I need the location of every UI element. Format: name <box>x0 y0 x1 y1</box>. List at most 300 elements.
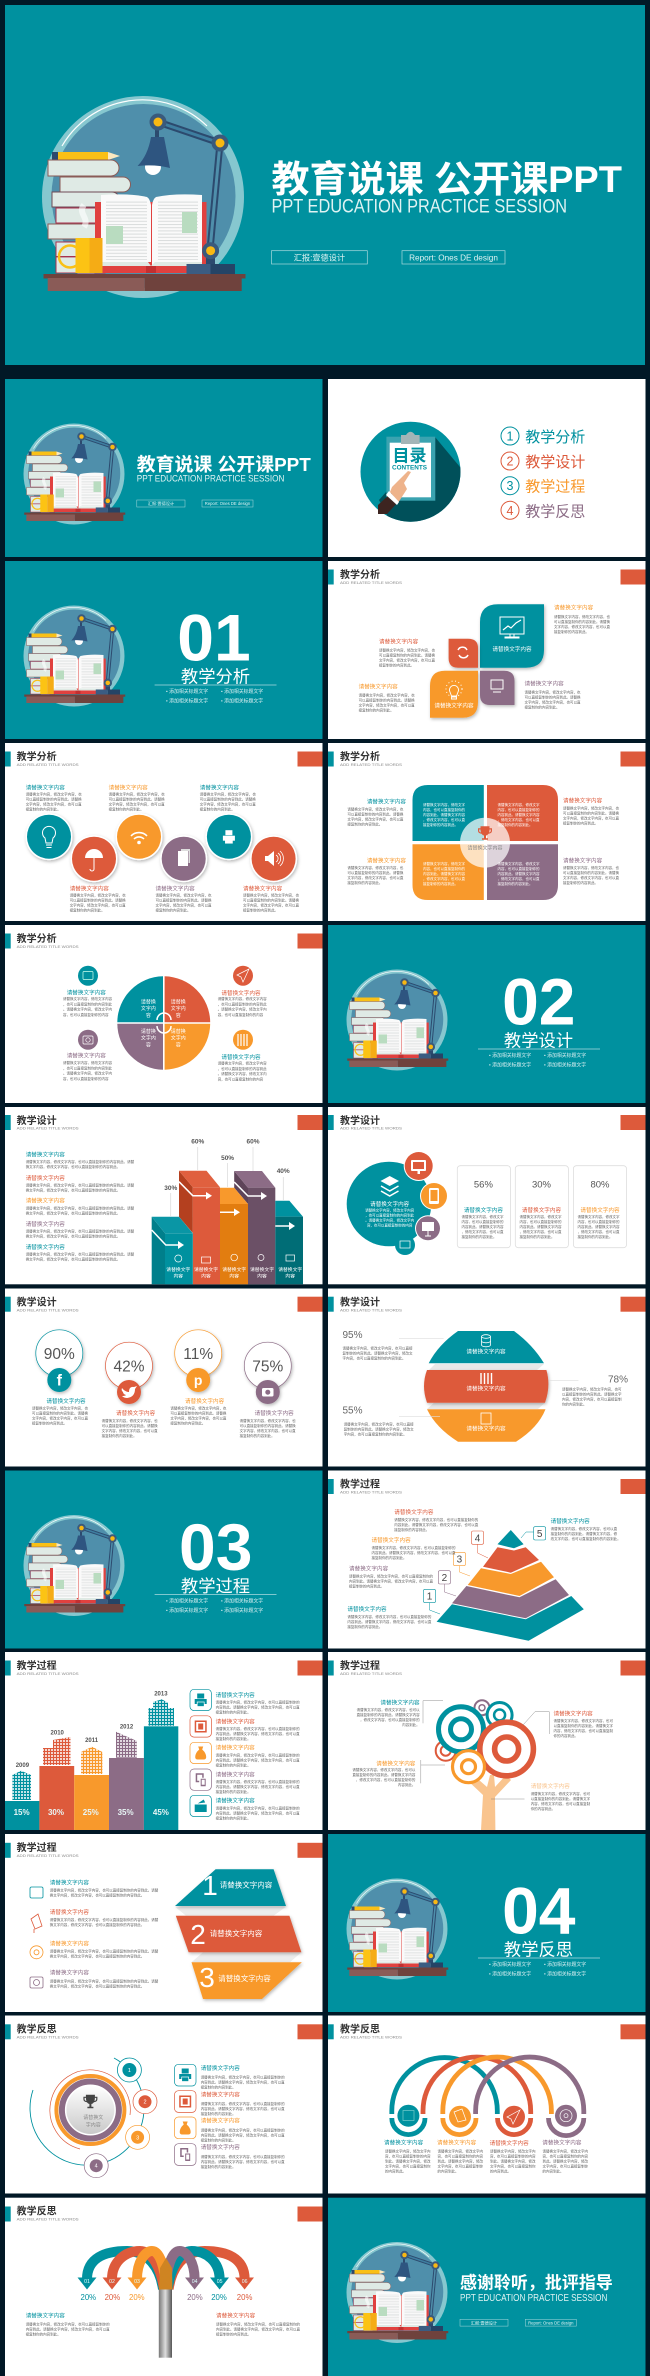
chart: bars with buildings: 2010 <box>51 1731 65 1737</box>
text block: 文字内容，修改文字内容，也可以直 <box>156 902 212 908</box>
text block: 接复制你的内容到此。 <box>243 908 278 912</box>
callout 5: 5 <box>537 1529 543 1540</box>
contents item 4 <box>501 501 585 520</box>
text block: 容，也可以直接复制你的内容 <box>542 2154 588 2158</box>
chart: 3D bars: 30% <box>164 1185 178 1192</box>
bullet texts: • 添加相关标题文字 <box>166 698 208 704</box>
text block: 到此。请替换文字内容，修改 <box>385 2158 431 2164</box>
callout 4 <box>472 1531 488 1558</box>
chart: bars with buildings <box>5 1691 178 1830</box>
panel: process building bars <box>5 1652 322 1830</box>
pie chart: 容 <box>146 1012 151 1019</box>
slide heading: 教学反思 <box>17 2022 57 2036</box>
badge: presenter: 汇报:壹德设计 <box>148 500 174 507</box>
panel: contents <box>328 379 646 557</box>
stat 55% <box>342 1406 440 1436</box>
text block: 请替换文字内容，修改文字内容，也 <box>32 1406 88 1410</box>
slide heading <box>5 2022 322 2039</box>
text block: 请替换文字内容 <box>67 989 106 997</box>
list item 1 <box>174 2064 285 2090</box>
stat 78%: 78% <box>608 1374 628 1385</box>
subtitle: PPT EDUCATION PRACTICE SESSION <box>272 196 567 218</box>
text block: 请替换文字内容，修改文字内容，也 <box>26 792 82 796</box>
list item 1: 内容到此。请替换文字内容，修改文字内容，也可以直 <box>201 2080 285 2084</box>
bullet texts: • 添加相关标题文字 <box>221 1607 263 1614</box>
text block: 请替换文字内容，修改文字内容，也 <box>563 806 619 810</box>
text block <box>563 797 619 826</box>
contents item 1 <box>501 427 585 446</box>
card: 30%: 内容，也可以直接复制你的 <box>520 1219 562 1224</box>
petal: teal: 请替换文字内容 <box>492 645 532 653</box>
text block: 请替换文字内容 <box>372 1536 411 1544</box>
text block <box>63 989 112 1017</box>
illustration <box>346 2242 448 2343</box>
ring: 90%: 90% <box>44 1346 75 1363</box>
text block: 文字内容，修改文字内容，也可以直 <box>26 802 82 806</box>
text block <box>347 1605 432 1629</box>
text block <box>554 603 610 634</box>
text block: 直接复制你的内容到此。请替换文字内容 <box>357 1712 420 1717</box>
slide heading: 教学分析 <box>340 568 380 581</box>
list item 1: 请替换文字内容 <box>50 1878 89 1886</box>
text block <box>384 2139 431 2174</box>
list item 4: 请替换文字内容，修改文字内容，也可以直接复制你的 <box>216 1779 300 1784</box>
orbit diagram: 1 <box>128 2068 131 2074</box>
percentage labels: 20% <box>129 2293 145 2302</box>
stat 95% <box>342 1330 444 1360</box>
text block: 文字内容，也可以直接复制你 <box>385 2164 431 2168</box>
text block <box>170 1397 227 1426</box>
text block: 请替换文字内容 <box>46 1397 86 1405</box>
text block: 接复制你的内容到此。 <box>347 822 382 826</box>
callout 2: 2 <box>442 1573 448 1584</box>
text block: 请替换文字内容 <box>200 783 239 791</box>
contents item 3: 3 <box>507 479 514 493</box>
text block <box>352 1759 416 1787</box>
text block: 请替换文字内容，修改文字内容，也 <box>347 806 404 812</box>
text block: 文字内容，修改文字内容，也可以直 <box>563 816 619 820</box>
list item 3 <box>30 1939 159 1959</box>
contents item 2: 2 <box>507 454 514 468</box>
chart: 3D bars: 60% <box>191 1138 205 1146</box>
stat 78%: 请替换文字内容，修改文字内容，也可 <box>562 1386 622 1392</box>
slide heading <box>328 750 646 767</box>
list item 4: 内容到此。请替换文字内容，修改文字内容，也可以直 <box>201 2159 285 2164</box>
text block: 容，也可以直接复制你的内容 <box>490 2154 536 2158</box>
list item 1 <box>190 1689 300 1714</box>
list item 2: 请替换文字内容，修改文字内容，也可以直接复制你的内容到此。请替 <box>50 1917 159 1922</box>
card: 56%: 内容到此。请替换文字内容 <box>462 1224 504 1229</box>
sliced circle: 请替换文字内容 <box>466 1385 506 1393</box>
text block: 文字内容，修改文字内容，也可以直 <box>170 1416 227 1420</box>
badge: presenter: 汇报:壹德设计 <box>294 252 345 262</box>
stat 95%: 复制你的内容到此。请替换文字内容，修改文 <box>342 1350 413 1356</box>
slide heading: 教学过程 <box>17 1841 57 1854</box>
circle: speaker <box>250 835 297 882</box>
text block: 到此。请替换文字内容，修改 <box>438 2158 483 2164</box>
slide heading: 教学反思 <box>340 2022 380 2036</box>
tile: teal: 内容到此。请替换文字内容 <box>423 812 465 817</box>
list text: 请替换文字内容，修改文字内容，也可以直接复制你的内容到此。请替 <box>26 1205 135 1210</box>
title: 教育说课 公开课PPT <box>272 159 622 200</box>
slide heading <box>5 750 322 767</box>
text block: 内容到此。请替换文字内容，修改文字内容，也可以直 <box>347 1619 432 1624</box>
text block: 可以直接复制你的内容到此。请替换 <box>563 810 619 816</box>
text block: 文字内容，也可以直接复制你 <box>438 2164 483 2168</box>
card: 56%: 内容，也可以直接复制你的 <box>462 1219 504 1224</box>
panel: analysis quadrant tiles <box>328 743 646 921</box>
bullet texts: • 添加相关标题文字 <box>544 1961 586 1968</box>
slide heading: ADD RELATED TITLE WORDS <box>340 1489 402 1494</box>
panel: cover thumbnail <box>5 379 322 557</box>
text block: ，也可以直接复制你的内容到此 <box>218 1001 267 1006</box>
stat 55%: 字内容，也可以直接复制你的内容到此。 <box>344 1432 407 1436</box>
text block: 接复制你的内容到此。 <box>379 662 414 668</box>
text block: ，修改文字内容，也可以直接复制你的 <box>360 1717 420 1722</box>
text block: 请替换文字内容 <box>367 798 406 806</box>
bullet texts: • 添加相关标题文字 <box>544 1970 586 1978</box>
bullet texts <box>166 688 263 704</box>
text block: 请替换文字内容 <box>367 856 406 864</box>
text block: 请替换文字内容 <box>554 603 594 611</box>
slide heading <box>328 2022 646 2039</box>
text block: 改文字内容，也可以直接复制你的内容到此。 <box>551 1536 621 1541</box>
ring: 11%: 11% <box>183 1346 213 1363</box>
ribbons <box>175 1869 302 1999</box>
pie chart: 请替换 <box>171 1028 186 1035</box>
chart: 3D bars: 40% <box>277 1168 290 1175</box>
illustration <box>346 1878 448 1980</box>
text block: 请替换文字内容 <box>551 1517 590 1525</box>
circle: umbrella <box>70 835 118 882</box>
text block: 请替换文字内容 <box>243 885 283 893</box>
list item 2 <box>31 1908 159 1933</box>
pie chart: 容 <box>176 1042 181 1048</box>
list item 2: 内容到此。请替换文字内容，修改文字内容，也可以直 <box>216 1731 300 1736</box>
contents item 3: 教学过程 <box>525 479 585 496</box>
text block <box>347 856 406 885</box>
text block <box>26 783 82 812</box>
illustration: books, desk lamp and mug <box>42 96 246 298</box>
text block: 容，也可以直接复制你的内容 <box>438 2154 483 2158</box>
text block <box>379 637 435 668</box>
bullet texts: • 添加相关标题文字 <box>489 1062 531 1068</box>
stat 55%: 55% <box>342 1406 363 1416</box>
text block: 请替换文字内容，修改文字内容 <box>218 996 267 1001</box>
list item 1: 请替换文字内容，修改文字内容，也可以直接复制你的 <box>201 2074 285 2080</box>
text block: 可以直接复制你的内容到此。请替换 <box>109 796 165 802</box>
text block <box>347 798 406 826</box>
list item 2: 换文字内容，修改文字内容，也可以直接复制你的内容到此。 <box>50 1922 144 1927</box>
list item 4: 请替换文字内容 <box>201 2143 240 2151</box>
icon: clipboard with pointing hand: CONTENTS <box>392 464 428 471</box>
section number: 01 <box>177 600 251 674</box>
badge: presenter <box>137 500 185 507</box>
text block: 请替换文字内容，修改文字内容，也 <box>102 1418 158 1423</box>
contents item 4: 4 <box>507 504 514 518</box>
contents item 1: 1 <box>507 430 514 444</box>
text block: 请替换文字内容，修改文字内容，也可以直接复制你的 <box>216 2322 300 2326</box>
text block: 请替换文字内容 <box>437 2139 477 2147</box>
callout 3: 3 <box>457 1555 463 1566</box>
list item 4: 请替换文字内容，修改文字内容，也可以直接复制你的 <box>201 2154 285 2159</box>
list text: 请替换文字内容 <box>26 1174 65 1182</box>
list item 3: 接复制你的内容到此。 <box>201 2138 236 2142</box>
text block: 你的内容到此。 <box>531 1806 555 1811</box>
slide heading: 教学分析 <box>17 932 57 945</box>
badge: report <box>202 500 253 507</box>
text block: 可以直接复制你的内容到此。请替换 <box>359 698 415 702</box>
list item 3: 接复制你的内容到此。 <box>216 1762 251 1768</box>
text block: 请替换文字内容，修改文字内容，也可以直接复制你的 <box>372 1545 456 1550</box>
list text: 换文字内容，修改文字内容，也可以直接复制你的内容到此。 <box>26 1234 120 1238</box>
list item 1: 接复制你的内容到此。 <box>201 2084 236 2090</box>
panel: design cards <box>328 1107 646 1284</box>
text block: 容，也可以直接复制你的内容 <box>63 1012 109 1017</box>
callout 4: 4 <box>475 1533 481 1544</box>
list item 3: 换文字内容，修改文字内容，也可以直接复制你的内容到此。 <box>50 1954 144 1958</box>
slide heading <box>328 1296 646 1312</box>
tile: purple <box>487 844 558 900</box>
illustration <box>24 1515 125 1616</box>
thank-you title: 感谢聆听，批评指导 <box>460 2272 613 2292</box>
text block: 接复制你的内容到此。 <box>347 880 382 885</box>
text block: 到此。请替换文字内容，修改 <box>490 2158 536 2164</box>
contents item 4: 教学反思 <box>525 503 585 520</box>
list item 3: 请替换文字内容，修改文字内容，也可以直接复制你的内容到此。请替 <box>50 1948 159 1954</box>
subtitle: PPT EDUCATION PRACTICE SESSION <box>137 474 284 485</box>
slide heading <box>5 1296 322 1312</box>
text block <box>531 1782 591 1811</box>
text block: 容，也可以直接复制你的内容 <box>218 1076 264 1081</box>
card: 56%: 请替换文字内容 <box>464 1206 503 1214</box>
text block: 请替换文字内容 <box>221 989 261 997</box>
text block: 直接复制你的内容到此。请替换文字内容 <box>352 1772 416 1777</box>
text block: 请替换文字内容，修改文字内容，也 <box>379 648 435 652</box>
illustration <box>24 424 125 524</box>
list text: 请替换文字内容，修改文字内容，也可以直接复制你的内容到此。请替 <box>26 1183 135 1188</box>
icon: equaliser badge <box>233 1030 253 1050</box>
card: 80%: 请替换文字内容，修改文字 <box>578 1214 620 1219</box>
bubble cluster: 请替换文字内容 <box>370 1200 410 1208</box>
text block: 请替换文字内容 <box>359 683 398 691</box>
text block: 可以直接复制你的内容到此。请替换 <box>379 652 435 658</box>
text block <box>109 783 165 812</box>
tile: purple: 接复制你的内容到此。 <box>498 881 532 886</box>
text block: 请替换文字内容 <box>347 1605 387 1613</box>
slide heading: 教学过程 <box>17 1659 57 1672</box>
list item 3: 请替换文字内容 <box>50 1939 89 1947</box>
text block: 请替换文字内容，修改文字内容，也 <box>524 690 581 694</box>
text block: 请替换文字内容，修改文字内容，也 <box>554 614 610 619</box>
ring: 75%: 75% <box>252 1358 284 1375</box>
petal: purple <box>480 671 514 705</box>
callout 5 <box>521 1527 546 1540</box>
chart: 3D bars <box>152 1138 303 1284</box>
ring: 11%: p <box>194 1372 202 1388</box>
slide heading <box>5 2205 322 2222</box>
icon: paper plane badge <box>233 966 253 986</box>
card: 80% <box>573 1166 626 1248</box>
list item 5: 内容到此。请替换文字内容，修改文字内容，也可以直 <box>216 1810 300 1816</box>
slide heading <box>328 568 646 585</box>
text block: 接复制你的内容到此。 <box>156 908 190 912</box>
text block: 文字内容，修改文字内容，也可以直 <box>347 816 404 822</box>
text block <box>32 1397 88 1426</box>
bullet texts: • 添加相关标题文字 <box>221 1598 263 1604</box>
list item 2: 请替换文字内容 <box>201 2090 240 2098</box>
text block <box>490 2139 536 2174</box>
list text: 请替换文字内容 <box>26 1197 65 1205</box>
slide heading <box>328 1659 646 1676</box>
section title: 教学分析 <box>181 666 250 686</box>
slide heading: ADD RELATED TITLE WORDS <box>17 1853 79 1858</box>
text block <box>243 885 299 912</box>
icon: speaker circle <box>449 2106 471 2128</box>
text block: 请替换文字内容，修改文字内容，也 <box>200 792 256 796</box>
text block: 请替换文字内容，修改文字内容，也 <box>70 892 126 898</box>
text block: 可以直接复制你的内容到此。请替换 <box>563 870 619 875</box>
orbit diagram <box>30 2058 157 2178</box>
text block: 请替换文字内容，修改文字内容，也可以 <box>352 1767 416 1772</box>
panel: section 04 <box>328 1834 646 2012</box>
text block: ，也可以直接复制你的内容到此 <box>218 1066 267 1071</box>
card: 56% <box>457 1166 510 1248</box>
circle: bulb <box>26 813 72 860</box>
card: 80%: 请替换文字内容 <box>580 1206 620 1214</box>
text block: 内容到此。 <box>398 1782 415 1787</box>
centre badge with trophy: 请替换文字内容 <box>467 844 503 852</box>
percentage labels: 20% <box>237 2293 252 2302</box>
list text: 换文字内容，修改文字内容，也可以直接复制你的内容到此。 <box>26 1256 120 1262</box>
section title: 教学反思 <box>504 1940 573 1960</box>
tile: teal: ，修改文字内容，也可以直 <box>423 817 465 822</box>
text block <box>218 989 267 1017</box>
bullet texts: • 添加相关标题文字 <box>221 688 263 695</box>
list item 1: 内容到此。请替换文字内容，修改文字内容，也可以直 <box>216 1704 300 1710</box>
list item 2: 接复制你的内容到此。 <box>216 1736 251 1741</box>
chart: 3D bars: 60% <box>246 1138 260 1146</box>
text block: 请替换文字内容 <box>384 2139 424 2147</box>
slide heading: ADD RELATED TITLE WORDS <box>340 1126 402 1130</box>
list item 1: 请替换文字内容 <box>216 1691 255 1699</box>
text block <box>437 2139 483 2174</box>
chart: bars with buildings: 2011 <box>85 1738 99 1744</box>
text block: 接复制你的内容到此。 <box>347 1624 382 1629</box>
text block: 文字内容，修改文字内容，也可以直 <box>524 700 581 704</box>
percentage labels: 20% <box>105 2293 120 2302</box>
chart: 3D bars: 内容 <box>173 1273 183 1280</box>
slide heading: ADD RELATED TITLE WORDS <box>340 2034 402 2039</box>
bullet texts <box>489 1052 586 1068</box>
tile: red: 内容到此。请替换文字内容 <box>498 812 540 817</box>
list item 4 <box>190 1769 300 1794</box>
text block <box>70 885 126 912</box>
text block: 接复制你的内容到此。 <box>70 908 105 912</box>
panel: closing slide <box>328 2198 646 2376</box>
card: 30%: 接复制你的内容到此。 <box>520 1234 554 1239</box>
text block: 文字内容，修改文字内容，也可以直 <box>102 1428 158 1433</box>
ring: 90%: f <box>57 1372 63 1390</box>
orbit diagram: 字内容 <box>86 2122 101 2128</box>
stat 55%: 复制你的内容到此。请替换文字内容，修改文 <box>344 1426 414 1432</box>
text block: 容，也可以直接复制你的内容 <box>385 2154 431 2158</box>
centre badge with trophy <box>460 818 510 868</box>
bubble cluster <box>347 1151 448 1255</box>
panel: analysis pie <box>5 925 322 1103</box>
tile: teal: 请替换文字内容，修改文字 <box>423 802 465 807</box>
text block: 接复制你的内容到此。 <box>200 806 235 812</box>
text block: 文字内容，修改文字内容，也可以直 <box>109 802 165 806</box>
bullet texts: • 添加相关标题文字 <box>544 1052 586 1059</box>
card: 80%: 内容到此。请替换文字内容 <box>578 1224 620 1229</box>
list item 2: 请替换文字内容，修改文字内容，也可以直接复制你的 <box>216 1726 300 1731</box>
section number: 03 <box>179 1510 252 1584</box>
text block: 可以直接复制你的内容到此。请替换 <box>32 1410 88 1416</box>
tile: teal: 接复制你的内容到此。 <box>423 822 458 827</box>
text block: 可以直接复制你的内容到此。请替换 <box>200 796 256 802</box>
slide heading: 教学设计 <box>17 1296 57 1308</box>
text block: 可以直接复制你的内容到此。请替换 <box>524 694 581 700</box>
arrow numbers: 01 <box>84 2279 90 2285</box>
stat 78%: 以直接复制你的内容到此。请替换文字 <box>562 1392 622 1396</box>
pie chart: 文字内 <box>171 1005 186 1012</box>
chart: bars with buildings: 30% <box>48 1808 64 1817</box>
list item 3 <box>190 1742 300 1768</box>
ribbons: 请替换文字内容 <box>218 1973 271 1983</box>
card: 80%: ，修改文字内容，也可以直 <box>578 1229 620 1234</box>
text block: 文字内容，修改文字内容，也可以直 <box>70 902 126 908</box>
arrow numbers: 03 <box>134 2279 140 2285</box>
text block: 内容，修改文字内容，也可以直接复制 <box>554 1728 613 1733</box>
text block: 请替换文字内容，修改文字内容 <box>63 996 112 1001</box>
bullet texts: • 添加相关标题文字 <box>221 698 263 704</box>
text block: 容，也可以直接复制你的内容 <box>63 1076 109 1081</box>
badge: presenter: 汇报:壹德设计 <box>471 2319 497 2326</box>
arrow numbers: 02 <box>109 2279 115 2285</box>
stat 78% <box>549 1374 628 1406</box>
callout 3 <box>453 1552 470 1576</box>
bullet texts: • 添加相关标题文字 <box>489 1961 531 1968</box>
tile: purple: 内容到此。请替换文字内容 <box>498 871 540 876</box>
list item 4 <box>30 1969 159 1988</box>
contents item 2: 教学设计 <box>525 454 585 471</box>
rule <box>478 1048 600 1050</box>
slide heading: 教学设计 <box>17 1114 57 1127</box>
rule <box>155 1594 276 1596</box>
list item 4: 请替换文字内容 <box>216 1770 255 1778</box>
chart: bars with buildings: 35% <box>118 1808 134 1817</box>
card: 30%: 请替换文字内容，修改文字 <box>520 1214 562 1219</box>
icon: clipboard with pointing hand <box>360 422 460 522</box>
text block: 请替换文字内容，修改文字内 <box>385 2148 431 2154</box>
text block: 请替换文字内容，修改文字内容，也可以直接复制你的 <box>26 2322 110 2326</box>
text block: 内容到此。请替换文字内容，修改文字内容，也可以直 <box>372 1550 456 1555</box>
icon: disc circle <box>555 2105 577 2127</box>
panel: reflection arches <box>328 2016 646 2194</box>
chart: 3D bars: 请替换文字 <box>222 1266 246 1273</box>
slide heading: ADD RELATED TITLE WORDS <box>17 2034 79 2039</box>
orbit diagram: 4 <box>95 2164 98 2170</box>
tile: red: ，修改文字内容，也可以直 <box>498 817 540 822</box>
panel: reflection orbit <box>5 2016 322 2194</box>
list item 4: 换文字内容，修改文字内容，也可以直接复制你的内容到此。 <box>50 1983 144 1988</box>
list text: 换文字内容，修改文字内容，也可以直接复制你的内容到此。 <box>26 1164 120 1169</box>
list item 4: 接复制你的内容到此。 <box>201 2164 236 2169</box>
text block: 文字内容，修改文字内容，也可以直 <box>379 658 435 662</box>
tile: orange: 内容，也可以直接复制你的 <box>423 866 465 871</box>
badge: report <box>402 251 505 264</box>
